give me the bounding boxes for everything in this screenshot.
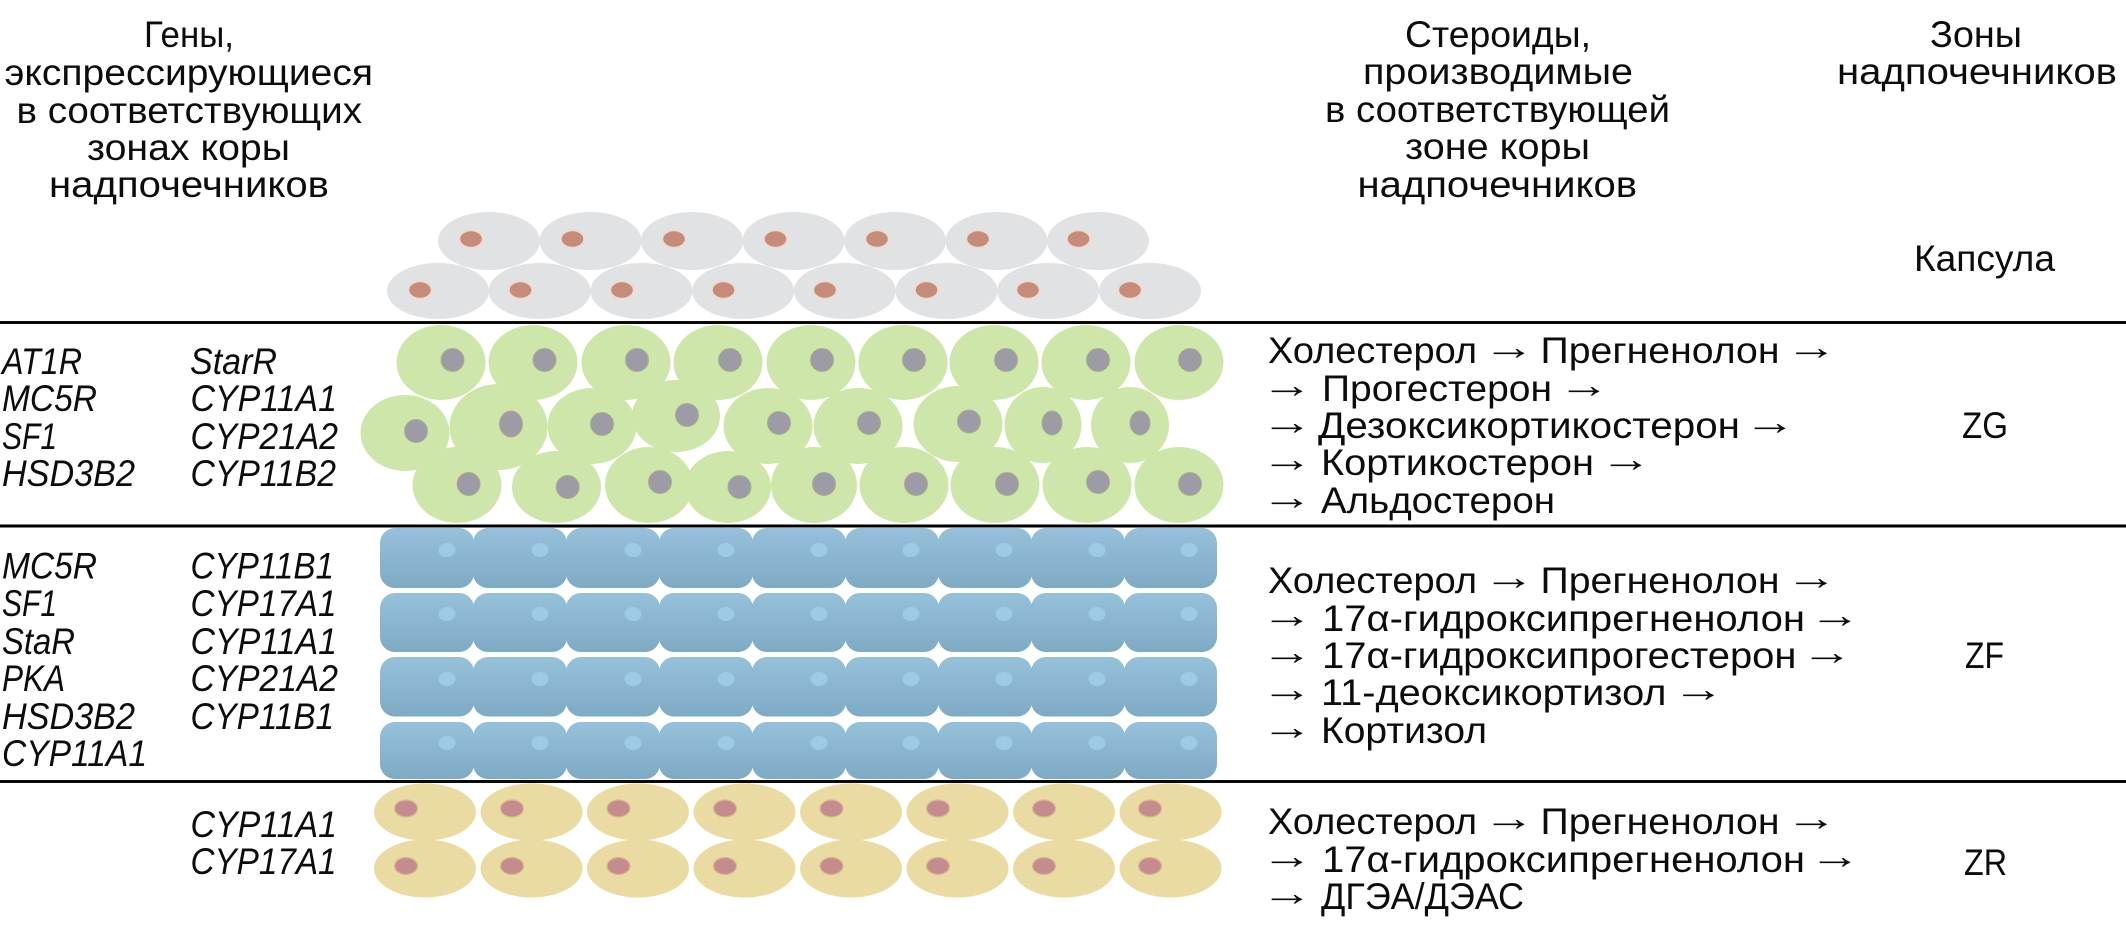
steroid pathway: zona glomerulosa: → <box>1558 365 1610 406</box>
gene list: zona glomerulosa, left column <box>0 341 135 494</box>
gene list: zona glomerulosa, left column: HSD3B2 <box>2 453 135 494</box>
steroid pathway: zona glomerulosa: Прогестерон <box>1322 368 1552 409</box>
gene list: zona glomerulosa, right column: CYP21A2 <box>190 416 338 457</box>
steroid pathway: zona glomerulosa: → <box>1744 402 1796 443</box>
steroid pathway: zona fasciculata: → <box>1801 632 1853 673</box>
heading: genes column: зонах коры <box>87 127 290 168</box>
zona glomerulosa cells (green) <box>360 325 1224 523</box>
heading: adrenal zones column <box>1837 14 2117 92</box>
steroid pathway: zona glomerulosa: → <box>1261 365 1313 406</box>
gene list: zona fasciculata, left column: MC5R <box>2 546 97 586</box>
steroid pathway: zona fasciculata: Прегненолон <box>1540 560 1780 601</box>
steroid pathway: zona fasciculata: → <box>1261 707 1313 748</box>
heading: steroids column: производимые <box>1363 51 1633 92</box>
steroid pathway: zona fasciculata: → <box>1786 557 1837 598</box>
gene list: zona fasciculata, left column: SF1 <box>2 583 57 624</box>
zone label: ZF: ZF <box>1965 635 2004 676</box>
gene list: zona glomerulosa, right column <box>190 341 338 494</box>
steroid pathway: zona fasciculata: → <box>1261 632 1313 673</box>
heading: steroids column <box>1325 14 1670 205</box>
steroid pathway: zona glomerulosa: Холестерол <box>1268 330 1477 371</box>
steroid pathway: zona glomerulosa: → <box>1600 439 1652 480</box>
gene list: zona fasciculata, right column: CYP11A1 <box>190 621 337 662</box>
steroid pathway: zona reticularis: 17α-гидроксипрегненолон <box>1322 839 1805 880</box>
steroid pathway: zona glomerulosa: → <box>1261 402 1313 443</box>
gene list: zona fasciculata, right column: CYP21A2 <box>190 658 338 699</box>
steroid pathway: zona glomerulosa <box>1261 327 1837 521</box>
gene list: zona glomerulosa, left column: AT1R <box>0 341 82 382</box>
zona reticularis cells (yellow) <box>374 783 1222 898</box>
heading: genes column <box>4 14 373 205</box>
steroid pathway: zona fasciculata <box>1261 557 1861 751</box>
steroid pathway: zona glomerulosa: Дезоксикортикостерон <box>1318 405 1740 446</box>
gene list: zona fasciculata, left column: HSD3B2 <box>2 696 135 737</box>
label: capsule: Капсула <box>1914 238 2055 279</box>
heading: adrenal zones column: Зоны <box>1930 14 2022 55</box>
heading: genes column: в соответствующих <box>16 90 363 131</box>
gene list: zona fasciculata, right column: CYP11B1 <box>190 546 334 586</box>
steroid pathway: zona fasciculata: Холестерол <box>1268 560 1477 601</box>
steroid pathway: zona fasciculata: → <box>1673 669 1724 710</box>
heading: genes column: экспрессирующиеся <box>4 52 373 93</box>
steroid pathway: zona glomerulosa: → <box>1786 327 1837 368</box>
gene list: zona fasciculata, left column: PKA <box>2 658 65 699</box>
steroid pathway: zona reticularis: → <box>1483 798 1535 839</box>
steroid pathway: zona reticularis: → <box>1786 798 1837 839</box>
steroid pathway: zona fasciculata: → <box>1809 595 1861 636</box>
steroid pathway: zona reticularis: Холестерол <box>1268 801 1477 842</box>
zona fasciculata cells (blue) <box>380 528 1217 779</box>
heading: adrenal zones column: надпочечников <box>1837 51 2117 92</box>
steroid pathway: zona glomerulosa: Альдостерон <box>1321 480 1555 521</box>
heading: genes column: надпочечников <box>49 164 329 205</box>
steroid pathway: zona reticularis <box>1261 798 1861 917</box>
steroid pathway: zona fasciculata: → <box>1483 557 1535 598</box>
heading: steroids column: Стероиды, <box>1405 14 1591 55</box>
steroid pathway: zona glomerulosa: → <box>1483 327 1535 368</box>
gene list: zona fasciculata, right column <box>190 546 338 737</box>
zone label: ZG: ZG <box>1962 405 2008 446</box>
gene list: zona reticularis: CYP17A1 <box>190 841 336 882</box>
steroid pathway: zona reticularis: → <box>1809 836 1861 877</box>
heading: steroids column: надпочечников <box>1358 164 1637 205</box>
gene list: zona reticularis: CYP11A1 <box>190 804 337 845</box>
steroid pathway: zona fasciculata: Кортизол <box>1321 710 1487 751</box>
gene list: zona fasciculata, right column: CYP11B1 <box>190 696 334 737</box>
steroid pathway: zona reticularis: → <box>1261 836 1313 877</box>
steroid pathway: zona fasciculata: → <box>1261 669 1313 710</box>
heading: steroids column: в соответствующей <box>1325 89 1670 130</box>
steroid pathway: zona glomerulosa: Кортикостерон <box>1321 442 1594 483</box>
gene list: zona fasciculata, left column <box>2 546 147 774</box>
steroid pathway: zona fasciculata: → <box>1261 595 1313 636</box>
gene list: zona glomerulosa, right column: CYP11A1 <box>190 378 337 419</box>
zone label: ZR: ZR <box>1964 842 2007 883</box>
gene list: zona glomerulosa, left column: MC5R <box>2 378 97 419</box>
gene list: zona reticularis <box>190 804 337 882</box>
gene list: zona fasciculata, right column: CYP17A1 <box>190 583 336 624</box>
steroid pathway: zona glomerulosa: Прегненолон <box>1540 330 1780 371</box>
steroid pathway: zona reticularis: → <box>1261 873 1313 914</box>
steroid pathway: zona glomerulosa: → <box>1261 439 1313 480</box>
gene list: zona fasciculata, left column: CYP11A1 <box>2 733 147 774</box>
steroid pathway: zona fasciculata: 11-деоксикортизол <box>1321 672 1666 713</box>
gene list: zona fasciculata, left column: StaR <box>2 621 75 662</box>
steroid pathway: zona fasciculata: 17α-гидроксипрогестерон <box>1322 635 1796 676</box>
heading: genes column: Гены, <box>144 14 234 55</box>
steroid pathway: zona reticularis: Прегненолон <box>1540 801 1780 842</box>
steroid pathway: zona fasciculata: 17α-гидроксипрегненолон <box>1322 598 1805 639</box>
gene list: zona glomerulosa, left column: SF1 <box>2 416 57 457</box>
gene list: zona glomerulosa, right column: StarR <box>190 341 277 382</box>
steroid pathway: zona reticularis: ДГЭА/ДЭАС <box>1321 876 1524 917</box>
capsule cells (grey) <box>387 212 1201 319</box>
steroid pathway: zona glomerulosa: → <box>1261 477 1313 518</box>
heading: steroids column: зоне коры <box>1405 126 1590 167</box>
gene list: zona glomerulosa, right column: CYP11B2 <box>190 453 336 494</box>
